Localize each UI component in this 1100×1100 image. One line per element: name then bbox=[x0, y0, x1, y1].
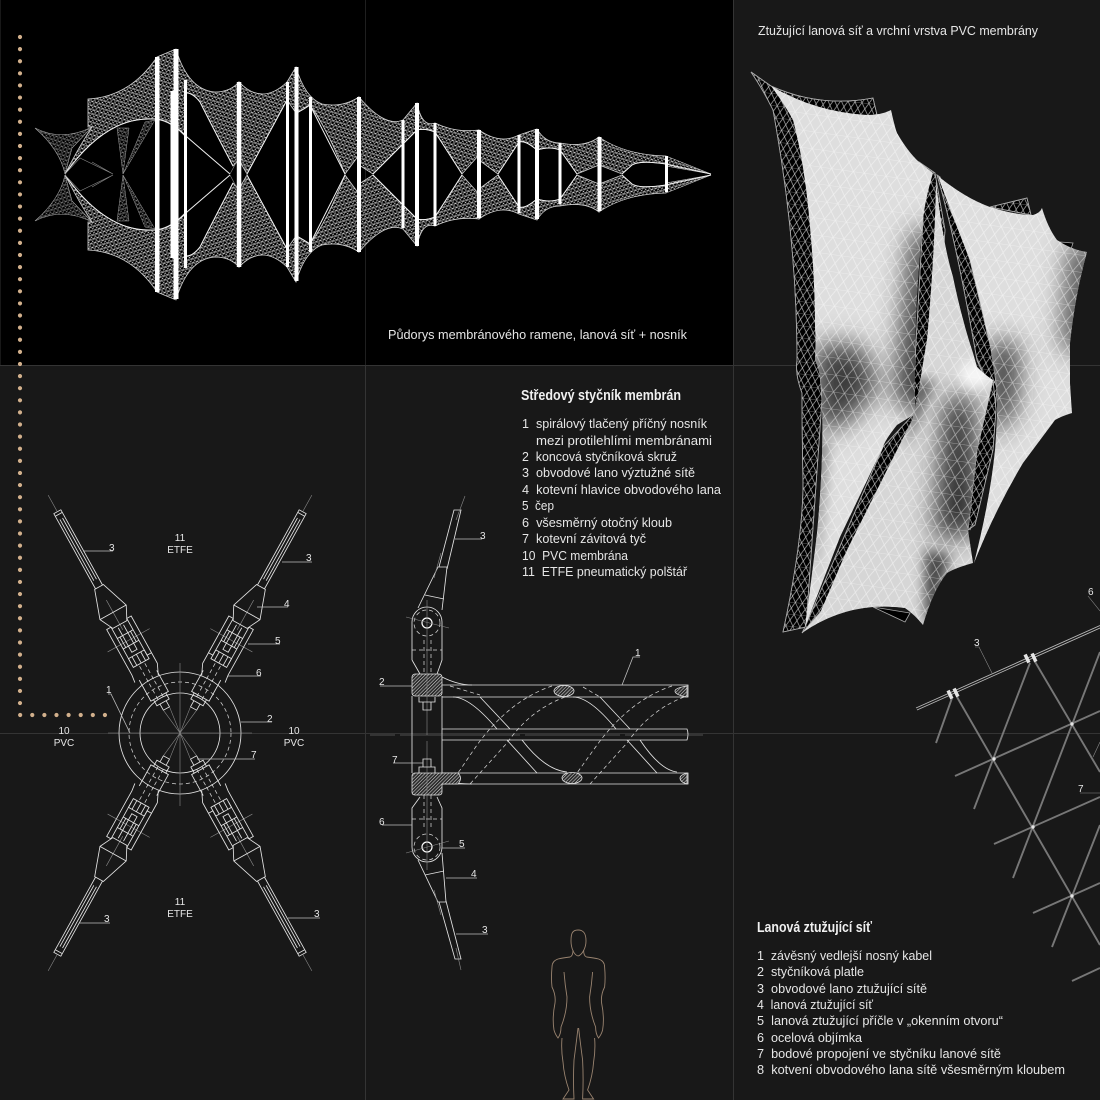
legend: cable net: 1 závěsný vedlejší nosný kabel bbox=[757, 949, 932, 963]
leaders bbox=[380, 539, 640, 934]
boundary cable bbox=[916, 626, 1100, 710]
legend: cable net: 8 kotvení obvodového lana sítě všesměrným kloubem bbox=[757, 1063, 1065, 1077]
numeric labels: 5 bbox=[275, 636, 281, 647]
membrane sail: centre bbox=[800, 170, 1000, 640]
legend: cable net: 6 ocelová objímka bbox=[757, 1031, 862, 1045]
panel: black plan panel bbox=[1, 0, 733, 365]
zone labels: ETFE bbox=[167, 909, 193, 920]
numeric labels: 3 bbox=[480, 531, 486, 542]
cable net, upper half bbox=[35, 49, 711, 174]
numeric labels: 2 bbox=[379, 677, 385, 688]
four anchoring arms bbox=[27, 483, 333, 983]
legend: central node: 11 ETFE pneumatický polštář bbox=[522, 565, 688, 579]
numeric labels: 3 bbox=[314, 909, 320, 920]
detail: stiffening cable net bbox=[916, 587, 1100, 981]
numeric labels: 5 bbox=[459, 839, 465, 850]
numeric labels: 4 bbox=[471, 869, 477, 880]
dotted guide line bbox=[20, 37, 105, 715]
numeric labels bbox=[379, 531, 641, 936]
zone labels: 10 bbox=[58, 726, 70, 737]
numeric labels: 3 bbox=[109, 543, 115, 554]
membrane 3D render bbox=[751, 72, 1100, 640]
membrane sail: left bbox=[771, 86, 933, 627]
heading: cable net: Lanová ztužující síť bbox=[757, 919, 873, 936]
upper joint and cable bbox=[406, 496, 465, 735]
caption: membrane render: Ztužující lanová síť a vrchní vrstva PVC membrány bbox=[758, 24, 1039, 38]
numeric labels: 6 bbox=[256, 668, 262, 679]
legend: central node: 6 všesměrný otočný kloub bbox=[522, 516, 672, 530]
numeric labels: 6 bbox=[1088, 587, 1094, 598]
legend: central node: 3 obvodové lano výztužné sítě bbox=[522, 466, 695, 480]
legend: central node bbox=[522, 417, 721, 579]
legend: central node: 2 koncová styčníková skruž bbox=[522, 450, 677, 464]
human scale figure bbox=[552, 930, 605, 1099]
numeric labels: 7 bbox=[1078, 784, 1084, 795]
plan of the membrane arm: cable net and girders bbox=[35, 49, 711, 300]
legend: cable net: 2 styčníková platle bbox=[757, 965, 864, 979]
numeric labels: 4 bbox=[284, 599, 290, 610]
legend: central node: 4 kotevní hlavice obvodového lana bbox=[522, 483, 721, 497]
numeric labels bbox=[104, 543, 320, 925]
zone labels: PVC bbox=[54, 738, 74, 749]
heading: central node: Středový styčník membrán bbox=[521, 387, 681, 404]
numeric labels: 2 bbox=[267, 714, 273, 725]
numeric labels: 3 bbox=[974, 638, 980, 649]
numeric labels: 3 bbox=[104, 914, 110, 925]
zone labels: 11 bbox=[175, 897, 186, 908]
membrane sail: right bbox=[938, 176, 1087, 563]
detail: section drawing with spiral girder bbox=[370, 496, 703, 970]
numeric labels: 1 bbox=[106, 685, 112, 696]
zone labels: PVC bbox=[284, 738, 304, 749]
clamps and nodes bbox=[946, 653, 1074, 898]
legend: cable net bbox=[757, 949, 1065, 1077]
transverse girders bbox=[155, 49, 668, 299]
zone labels: ETFE bbox=[167, 545, 193, 556]
legend: central node: mezi protilehlími membránami bbox=[536, 434, 712, 448]
legend: cable net: 5 lanová ztužující příčle v „okenním otvoru“ bbox=[757, 1014, 1003, 1028]
legend: central node: 1 spirálový tlačený příčný nosník bbox=[522, 417, 708, 431]
numeric labels: 3 bbox=[482, 925, 488, 936]
legend: cable net: 3 obvodové lano ztužující sítě bbox=[757, 982, 927, 996]
legend: central node: 5 čep bbox=[522, 499, 554, 513]
legend: cable net: 4 lanová ztužující síť bbox=[757, 998, 873, 1012]
back cable nets bbox=[751, 72, 1073, 633]
net cables bbox=[936, 652, 1100, 981]
caption: plan: Půdorys membránového ramene, lanová síť + nosník bbox=[388, 328, 688, 342]
legend: cable net: 7 bodové propojení ve styčníku lanové sítě bbox=[757, 1047, 1001, 1061]
legend: central node: 10 PVC membrána bbox=[522, 549, 628, 563]
leaders bbox=[975, 596, 1100, 793]
detail: X node drawing bbox=[27, 483, 333, 983]
chords and centre tube bbox=[370, 677, 703, 784]
numeric labels: 1 bbox=[635, 648, 641, 659]
numeric labels: 7 bbox=[251, 750, 257, 761]
zone labels: 10 bbox=[288, 726, 300, 737]
zone labels bbox=[54, 533, 304, 920]
leaders bbox=[79, 551, 320, 923]
zone labels: 11 bbox=[175, 533, 186, 544]
ring and centre lines bbox=[108, 663, 252, 806]
legend: central node: 7 kotevní závitová tyč bbox=[522, 532, 646, 546]
numeric labels: 3 bbox=[306, 553, 312, 564]
numeric labels bbox=[974, 587, 1094, 795]
numeric labels: 6 bbox=[379, 817, 385, 828]
numeric labels: 7 bbox=[392, 755, 398, 766]
hatched end blocks and ovals bbox=[412, 674, 687, 795]
lower joint and cable bbox=[406, 741, 461, 970]
cable net, lower half (mirrored) bbox=[35, 175, 711, 300]
